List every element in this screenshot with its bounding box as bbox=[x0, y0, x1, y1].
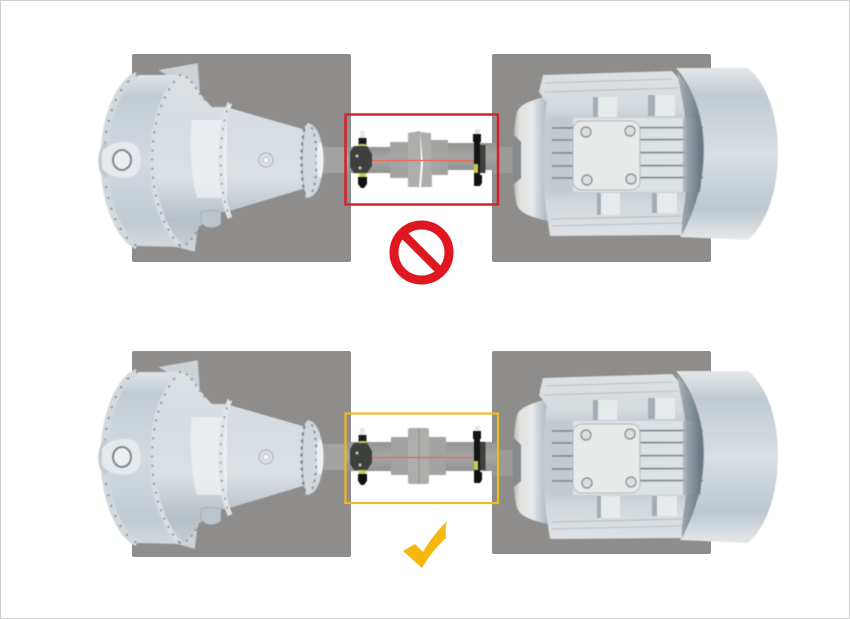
yellow highlight box bbox=[346, 414, 498, 503]
gearbox (top) bbox=[98, 63, 347, 252]
right laser sensor (top) bbox=[473, 129, 486, 186]
panel: misaligned setup (top row) bbox=[98, 54, 778, 262]
gearbox mounting plate (top) bbox=[132, 54, 351, 262]
panel: aligned setup (bottom row) bbox=[98, 351, 778, 557]
icon: check mark bbox=[403, 521, 447, 568]
electric motor (bottom) bbox=[492, 371, 778, 543]
left laser sensor (bottom) bbox=[350, 428, 372, 485]
misaligned coupling bbox=[345, 131, 497, 187]
motor mounting plate (bottom) bbox=[492, 351, 711, 554]
left laser sensor (top) bbox=[350, 131, 372, 188]
right laser sensor (bottom) bbox=[473, 426, 486, 483]
laser line (bottom) bbox=[372, 456, 477, 458]
gearbox mounting plate (bottom) bbox=[132, 351, 351, 557]
aligned coupling bbox=[345, 428, 497, 484]
motor mounting plate (top) bbox=[492, 54, 711, 262]
red highlight box bbox=[346, 114, 498, 204]
gearbox (bottom) bbox=[98, 360, 347, 549]
icon: prohibited sign bbox=[394, 225, 449, 280]
laser line (top) bbox=[372, 160, 477, 162]
electric motor (top) bbox=[492, 68, 778, 240]
